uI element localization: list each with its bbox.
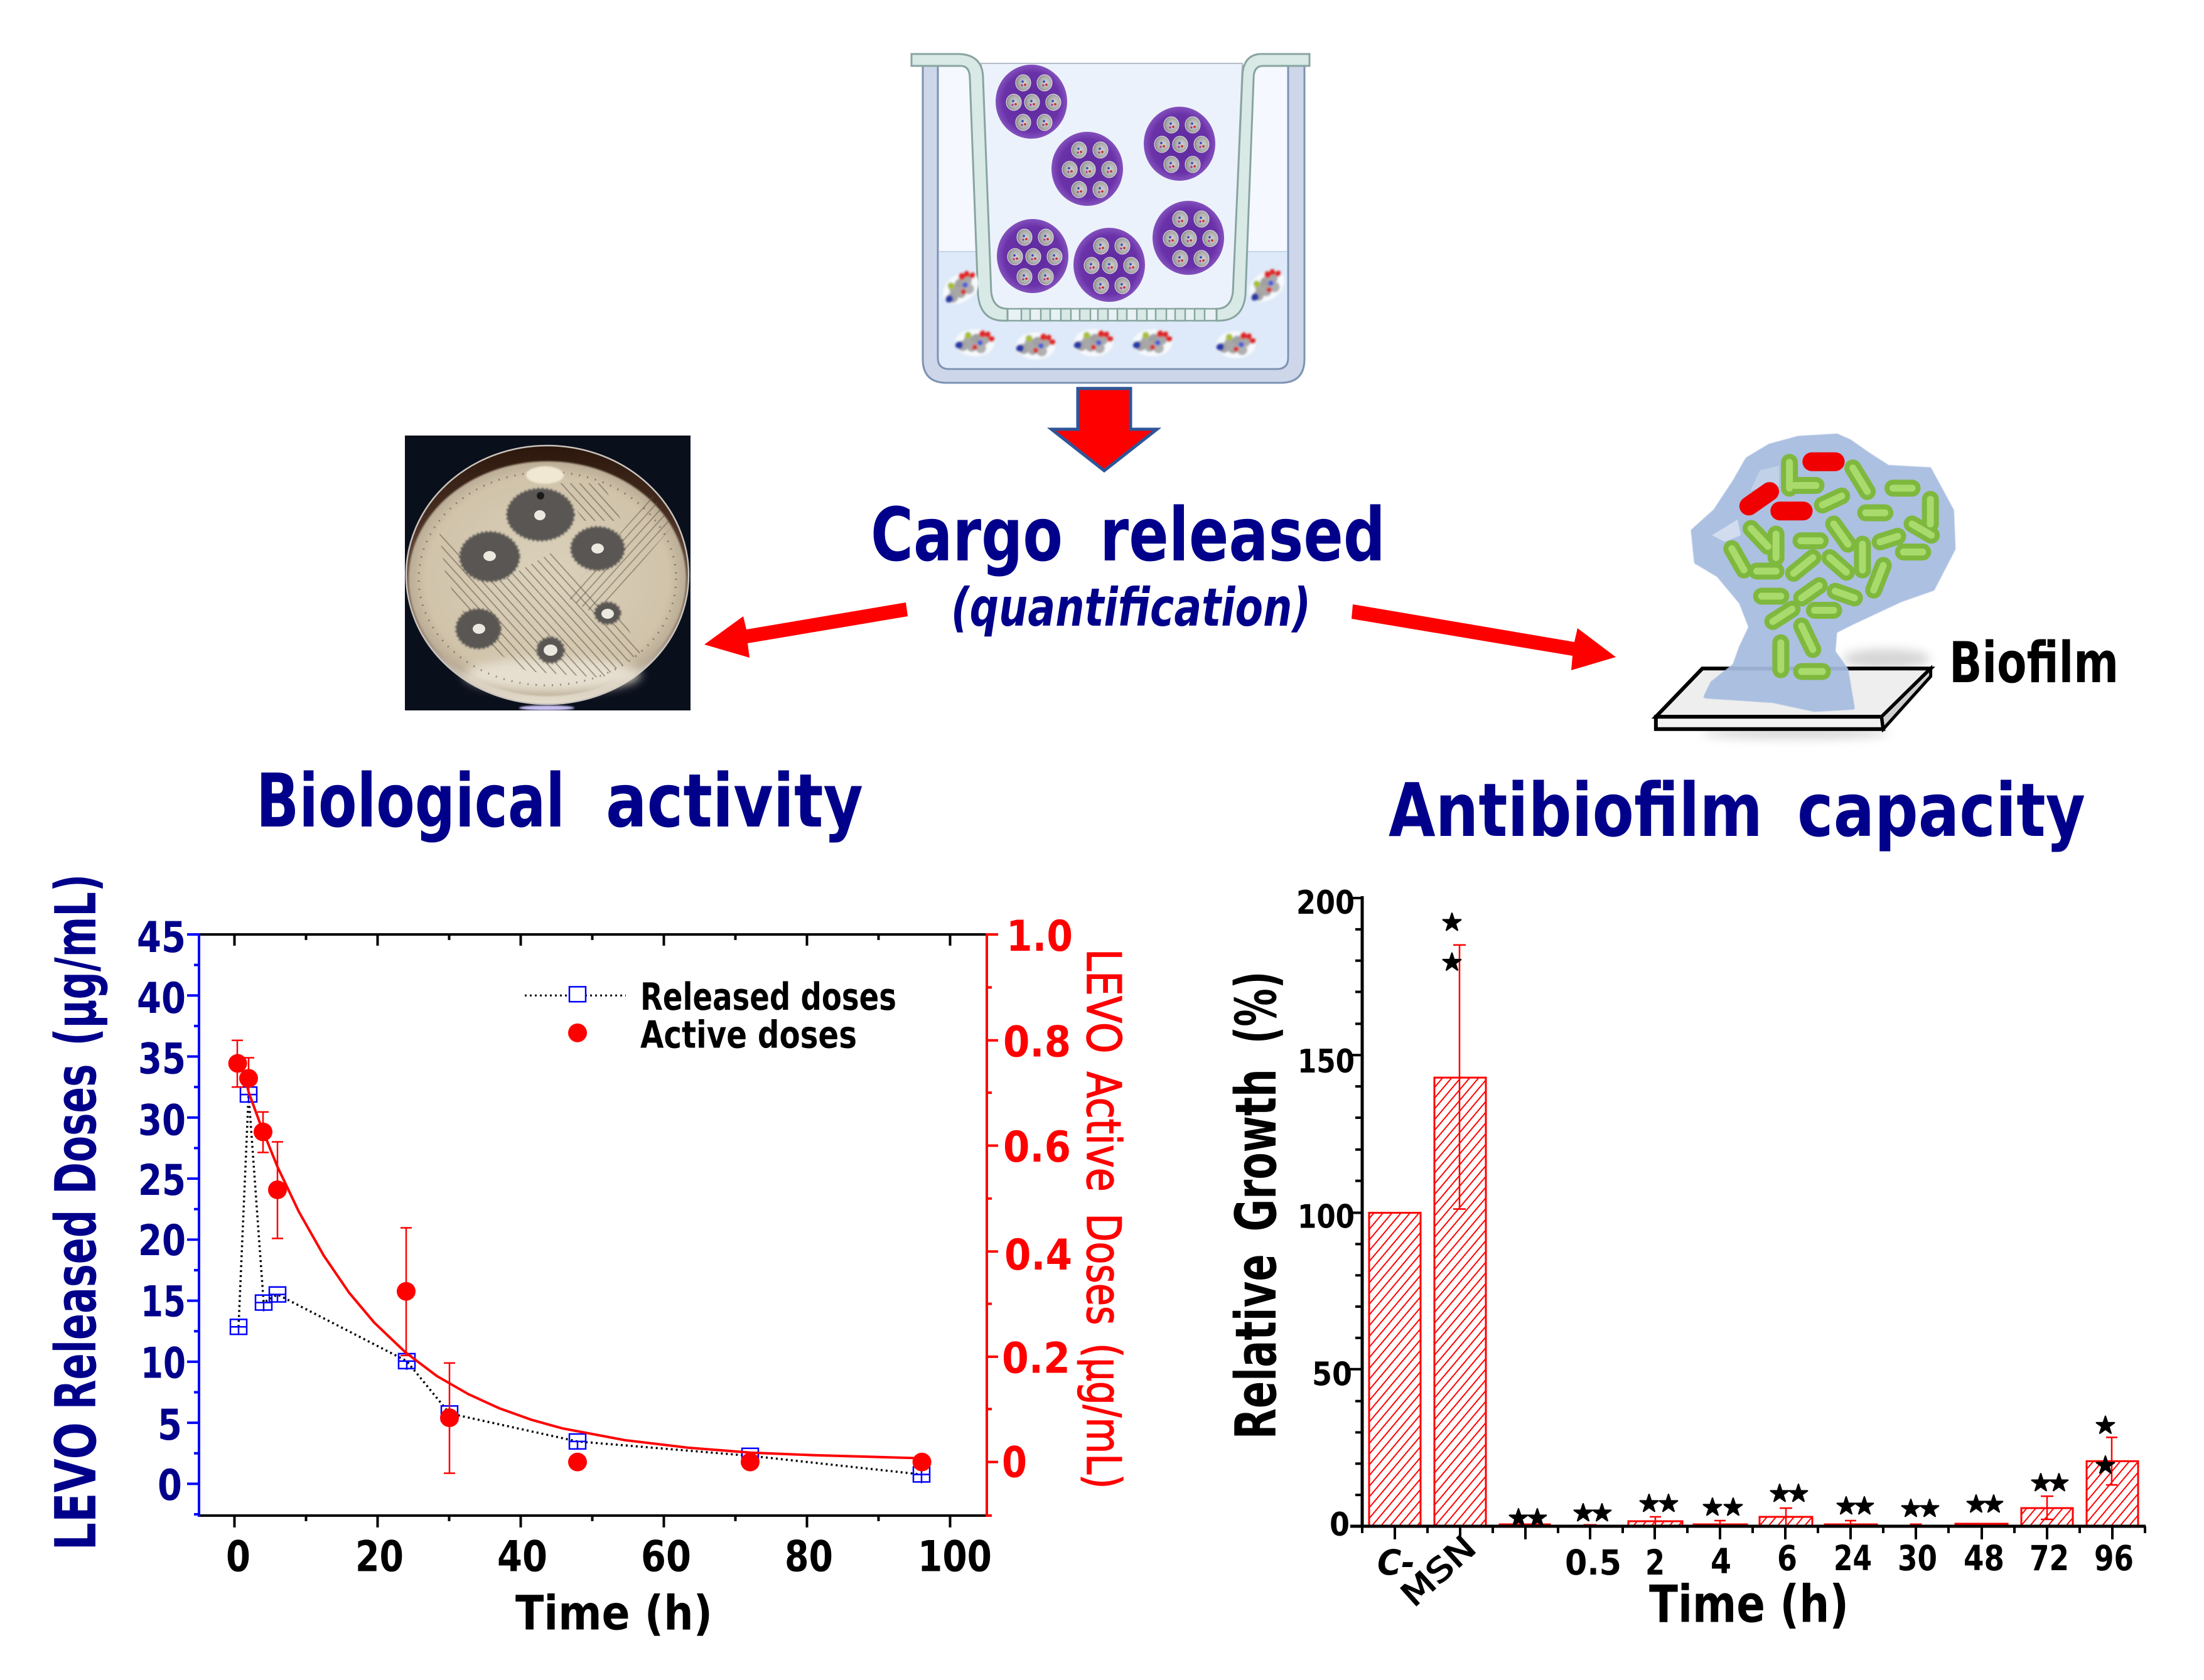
left axis tick labels — [137, 912, 186, 1510]
biofilm matrix — [1693, 436, 1954, 710]
right axis tick labels: 0.4 — [1004, 1230, 1072, 1280]
bars — [1369, 1078, 2138, 1526]
released doses dotted line — [239, 1094, 922, 1474]
y axis tick labels: 200 — [1296, 884, 1355, 922]
right axis tick labels: 0.2 — [1002, 1334, 1070, 1383]
x axis tick labels: 60 — [641, 1532, 691, 1581]
x axis tick labels: MSN — [1394, 1529, 1483, 1614]
y axis tick labels — [1296, 884, 1355, 1544]
left axis tick labels: 45 — [137, 912, 186, 962]
right axis tick labels — [1002, 911, 1073, 1487]
heading: cargo released — [871, 491, 1385, 578]
left axis tick labels: 35 — [138, 1034, 186, 1083]
left axis tick labels: 40 — [137, 973, 186, 1023]
right axis title — [1076, 949, 1131, 1489]
left axis tick labels: 5 — [158, 1400, 182, 1450]
significance stars: ★★ — [1965, 1490, 2004, 1517]
x axis tick labels: 0.5 — [1565, 1543, 1621, 1583]
x axis tick labels: 24 — [1834, 1538, 1872, 1578]
significance stars: ★ — [2095, 1452, 2116, 1479]
x axis tick labels: 0 — [226, 1532, 250, 1581]
x axis tick labels — [1377, 1529, 2134, 1614]
y axis — [1350, 896, 1362, 1528]
x axis tick labels: 72 — [2029, 1538, 2069, 1578]
released doses markers — [230, 1087, 930, 1483]
right axis — [987, 933, 998, 1517]
heading: antibiofilm capacity: Antibiofilm — [1389, 767, 1763, 853]
left axis tick labels: 20 — [138, 1216, 186, 1265]
right axis tick labels: 0.8 — [1003, 1017, 1071, 1066]
x axis tick labels: 20 — [355, 1532, 404, 1581]
pale lower edge — [465, 658, 640, 691]
x axis tick labels: 4 — [1711, 1541, 1731, 1581]
left axis title — [44, 874, 109, 1551]
green bacteria highlights — [1732, 463, 1932, 671]
significance stars: ★★ — [1900, 1495, 1940, 1522]
photo: agar diffusion plate — [405, 436, 691, 710]
shadows — [1701, 649, 1930, 739]
error bars — [1453, 945, 2117, 1526]
significance stars: ★ — [1441, 949, 1463, 976]
significance stars: ★ — [2095, 1411, 2116, 1438]
significance stars: ★★ — [1508, 1504, 1548, 1531]
x axis tick labels: 30 — [1898, 1538, 1937, 1578]
x axis tick labels: 2 — [1645, 1543, 1665, 1583]
active doses fit curve — [246, 1081, 922, 1458]
right axis title: Doses — [1076, 1214, 1131, 1325]
left axis tick labels: 10 — [141, 1339, 186, 1388]
subheading: quantification: (quantification) — [951, 577, 1311, 638]
x axis tick labels: 80 — [785, 1532, 833, 1581]
significance stars: ★ — [1441, 909, 1463, 936]
significance stars: ★★ — [1638, 1490, 1679, 1517]
significance stars: ★★ — [1572, 1499, 1613, 1526]
left axis tick labels: 15 — [141, 1277, 186, 1326]
plot frame — [199, 934, 987, 1528]
y axis title: (%) — [1224, 971, 1289, 1044]
significance stars — [1441, 909, 2116, 1531]
insert interior — [981, 63, 1242, 309]
bacterial streaks — [439, 483, 672, 678]
right axis title: LEVO — [1076, 949, 1131, 1054]
heading: biological activity — [256, 757, 863, 844]
active doses error bars — [232, 1041, 455, 1474]
y axis tick labels: 50 — [1312, 1356, 1352, 1394]
inhibition zones — [456, 489, 624, 663]
active doses markers — [228, 1054, 932, 1472]
y axis tick labels: 100 — [1298, 1198, 1355, 1236]
dish rim — [406, 446, 689, 704]
x axis title: Time (h) — [515, 1586, 712, 1641]
left axis tick labels: 0 — [158, 1460, 182, 1510]
label: biofilm: Biofilm — [1949, 630, 2119, 696]
y axis title: Relative — [1224, 1254, 1289, 1439]
legend: Active doses — [640, 1014, 857, 1057]
arrow: left to biological activity — [704, 602, 908, 658]
heading: cargo released: released — [1100, 491, 1385, 578]
mottled periphery — [419, 472, 676, 685]
left axis tick labels: 25 — [138, 1155, 186, 1205]
significance stars: ★★ — [1836, 1492, 1875, 1519]
left axis title: LEVO — [44, 1422, 109, 1551]
legend — [525, 976, 896, 1057]
right axis tick labels: 0.6 — [1003, 1123, 1071, 1172]
antibiotic discs — [473, 492, 614, 656]
y axis title: Growth — [1224, 1069, 1289, 1231]
released drug molecules — [937, 264, 1291, 360]
arrow: down from well — [1051, 388, 1157, 471]
y axis tick labels: 150 — [1298, 1043, 1355, 1081]
left axis title: (µg/mL) — [44, 874, 109, 1046]
x axis tick labels: 96 — [2094, 1538, 2134, 1578]
left axis — [187, 933, 199, 1517]
heading: cargo released: Cargo — [871, 491, 1063, 578]
red dead bacteria — [1749, 462, 1836, 511]
right axis title: (µg/mL) — [1076, 1343, 1131, 1489]
x axis title: Time (h) — [1649, 1575, 1849, 1634]
x axis tick labels — [226, 1532, 992, 1581]
green bacteria — [1732, 463, 1932, 671]
heading: antibiofilm capacity — [1389, 767, 2085, 853]
agar surface — [409, 461, 686, 696]
y axis title — [1224, 971, 1289, 1439]
right axis tick labels: 0 — [1002, 1438, 1027, 1487]
x axis — [1350, 1526, 2146, 1539]
x axis tick labels: 40 — [497, 1532, 547, 1581]
legend: Released doses — [640, 976, 896, 1019]
illustration: biofilm on surface — [1656, 436, 1954, 739]
outer well — [923, 66, 1304, 383]
heading: antibiofilm capacity: capacity — [1797, 767, 2085, 853]
insert wall and membrane — [911, 54, 1309, 321]
x axis tick labels: C- — [1377, 1543, 1415, 1583]
diagram: transwell release setup — [911, 54, 1309, 383]
left axis title: Released — [44, 1210, 109, 1410]
right axis title: Active — [1076, 1071, 1131, 1192]
significance stars: ★★ — [1769, 1480, 1809, 1507]
significance stars: ★★ — [2030, 1469, 2070, 1496]
heading: biological activity: Biological — [256, 757, 565, 844]
rim highlight — [526, 466, 564, 484]
x axis tick labels: 48 — [1964, 1538, 2004, 1578]
heading: biological activity: activity — [606, 757, 863, 844]
x axis tick labels: 6 — [1777, 1538, 1797, 1578]
x axis tick labels: 100 — [918, 1532, 992, 1581]
surface slab — [1656, 668, 1931, 729]
right axis tick labels: 1.0 — [1006, 911, 1073, 961]
significance stars: ★★ — [1702, 1494, 1744, 1521]
y axis tick labels: 0 — [1330, 1506, 1350, 1544]
left axis tick labels: 30 — [138, 1096, 186, 1145]
arrow: right to antibiofilm capacity — [1352, 604, 1616, 670]
nanoparticles — [996, 65, 1224, 302]
chart: LEVO released and active doses over time — [44, 874, 1131, 1641]
chart: relative growth bars — [1224, 884, 2146, 1634]
left axis title: Doses — [44, 1064, 109, 1194]
